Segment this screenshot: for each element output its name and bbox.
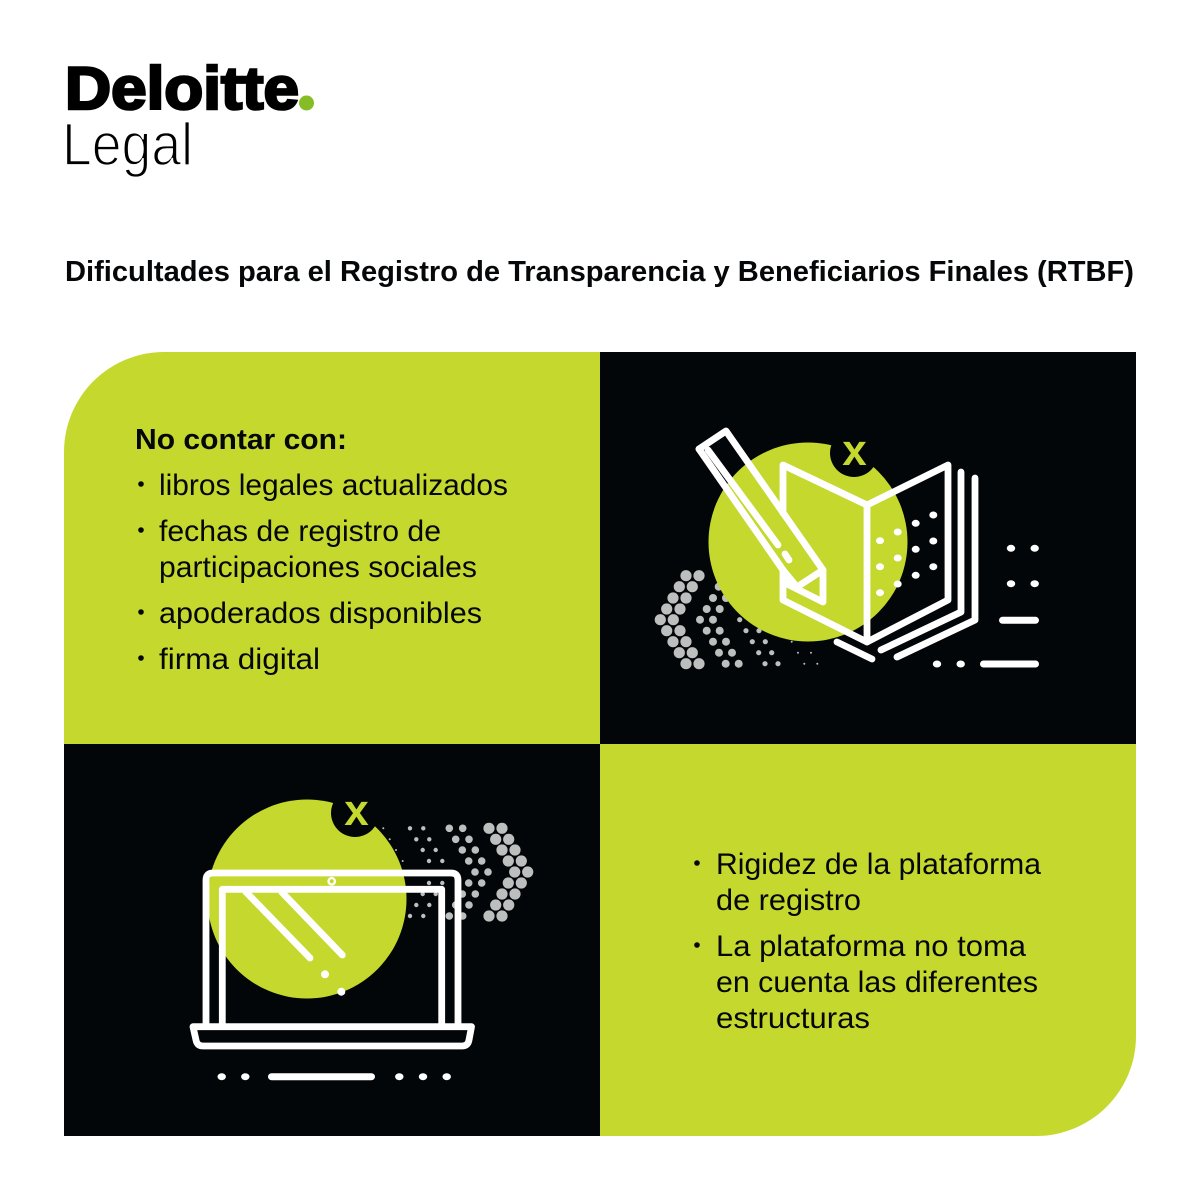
list: platform issues: Rigidez de la plataforma	[716, 848, 1041, 881]
list: platform issues: estructuras	[716, 1002, 870, 1035]
icon: x mark: x	[842, 426, 867, 475]
dotted chevrons	[382, 823, 533, 922]
panel: book illustration	[600, 352, 1136, 744]
panel: laptop illustration	[64, 744, 600, 1136]
list: missing items	[138, 469, 508, 676]
list: missing items: participaciones sociales	[159, 551, 477, 584]
lime circle with notch	[208, 789, 406, 998]
list: missing items: apoderados disponibles	[159, 597, 482, 630]
list: missing items: firma digital	[159, 643, 320, 676]
page dots	[876, 512, 937, 596]
logo: Deloitte Legal: Legal	[62, 111, 193, 178]
panel: platform rigidity	[600, 744, 1136, 1136]
panel: no contar con	[64, 352, 600, 744]
heading: no contar con: No contar con:	[135, 424, 347, 456]
screen dots	[321, 970, 345, 996]
title: Dificultades para el Registro de Transparencia y Beneficiarios Finales (RTBF)	[65, 256, 1134, 288]
dots and dash	[218, 1073, 451, 1080]
icon: book	[783, 465, 975, 659]
dots and dashes	[933, 545, 1039, 668]
list: platform issues: en cuenta las diferentes	[716, 966, 1038, 999]
logo: Deloitte Legal: Deloitte	[65, 55, 299, 122]
list: platform issues: de registro	[716, 884, 861, 917]
list: missing items: libros legales actualizados	[159, 469, 508, 502]
list: platform issues	[694, 848, 1041, 1035]
list: platform issues: La plataforma no toma	[716, 930, 1026, 963]
icon: pencil	[699, 431, 823, 602]
icon: x mark: x	[344, 786, 369, 835]
logo: Deloitte Legal	[62, 55, 314, 178]
icon: laptop	[193, 873, 472, 1046]
list: missing items: fechas de registro de	[159, 515, 441, 548]
lime circle with notch	[708, 429, 908, 642]
dotted chevrons	[655, 570, 818, 669]
